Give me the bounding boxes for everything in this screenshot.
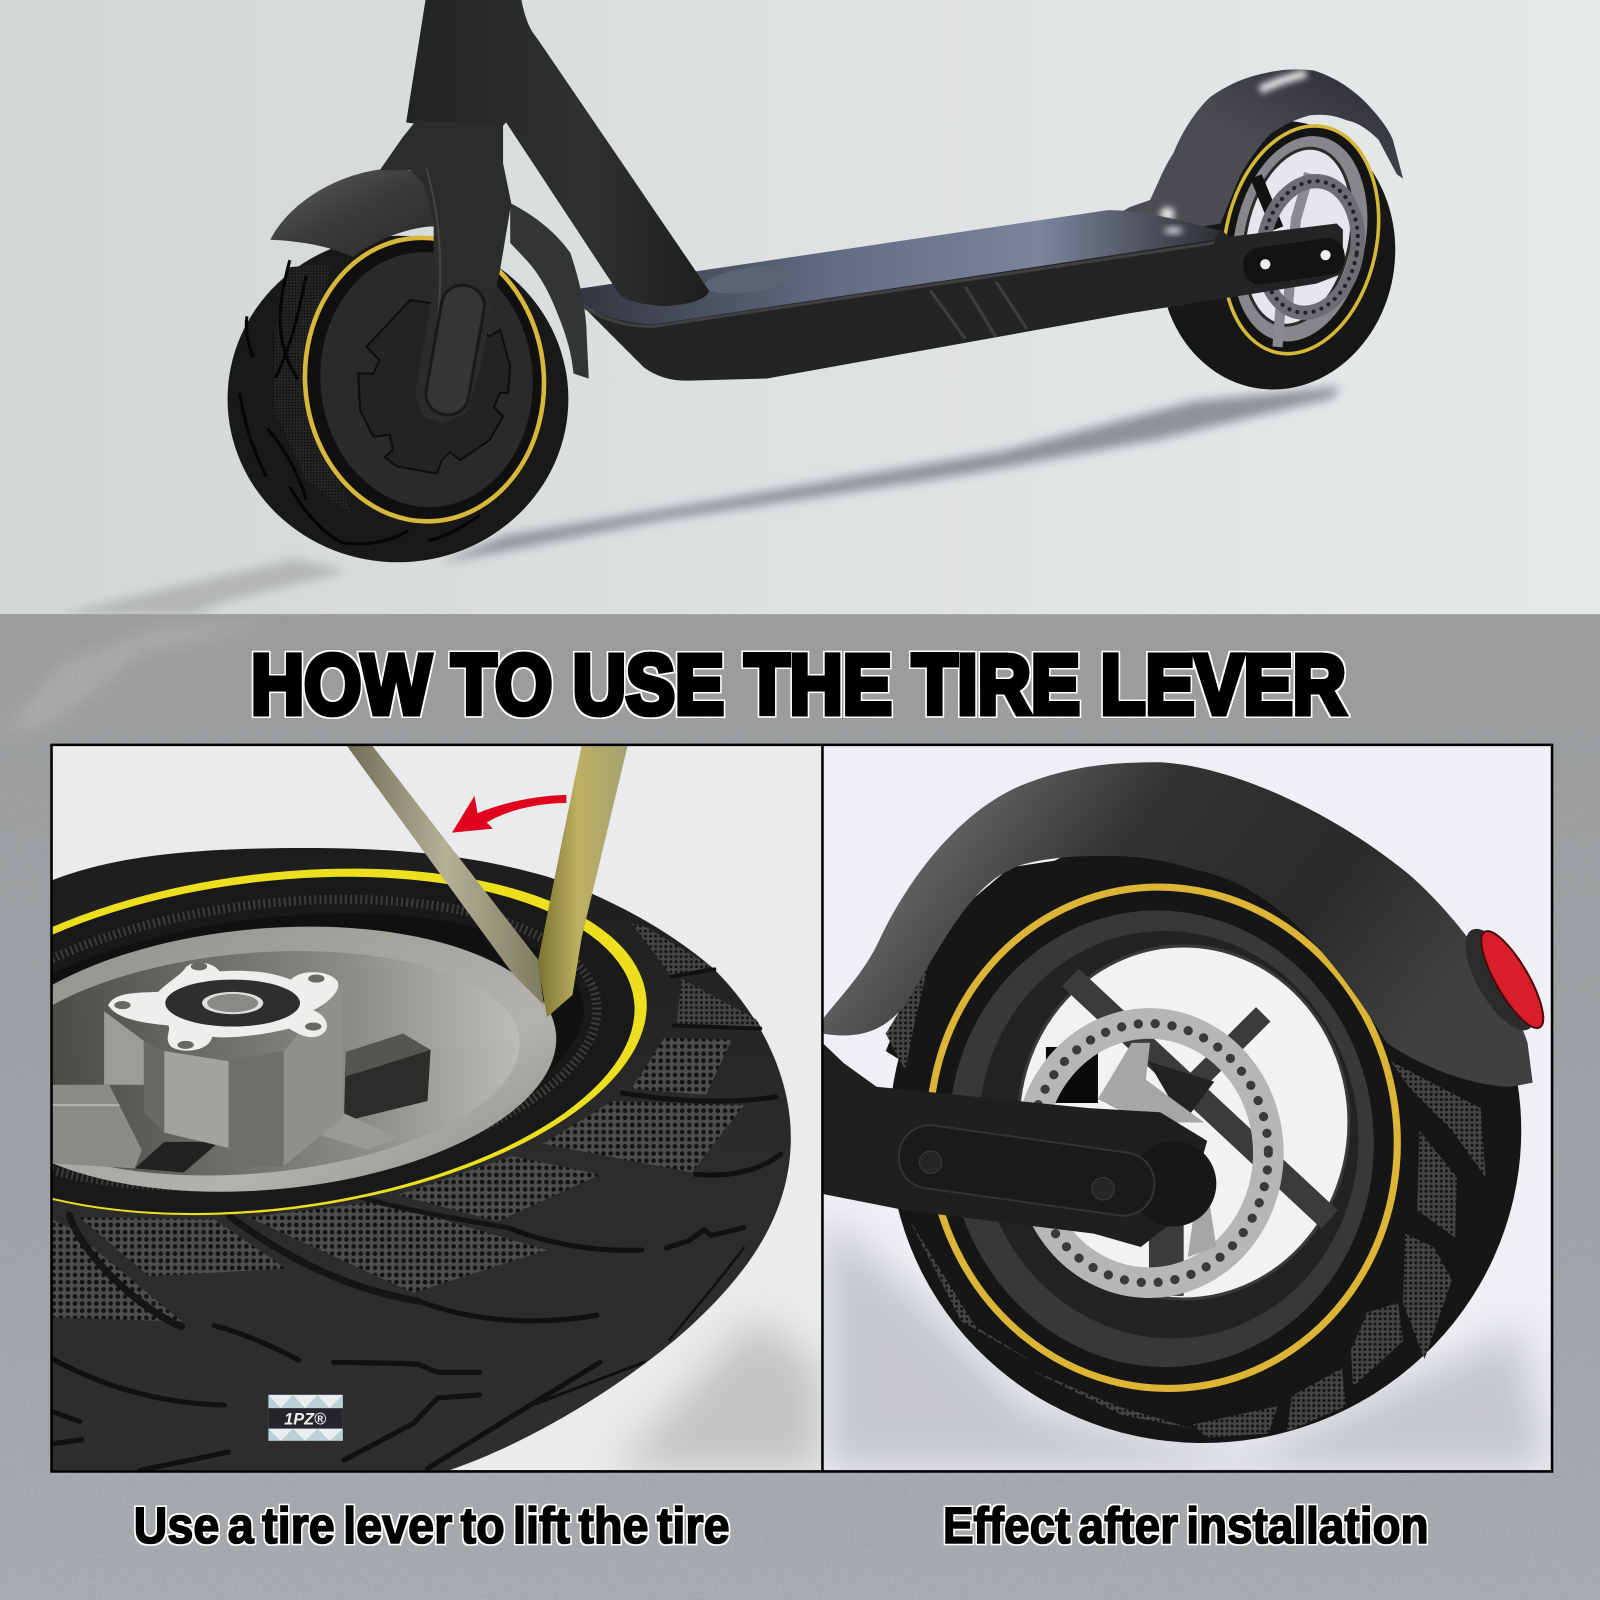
deck (579, 210, 1347, 381)
top photo: scooter on pavement (0, 0, 1600, 614)
column facets (104, 1011, 144, 1085)
panel frame (52, 745, 1552, 1471)
tread patches (51, 923, 761, 1321)
tire lever 1 (347, 746, 544, 1005)
tail light (1466, 928, 1544, 1030)
brand label 1PZ (268, 1395, 343, 1441)
gray lower background (0, 614, 1600, 1600)
tread grooves (51, 969, 781, 1470)
caption: right: Effect after installation (943, 1497, 1429, 1554)
caption: left: Use a tire lever to lift the tire (134, 1497, 730, 1554)
wheel spokes (1070, 978, 1330, 1219)
scooter ground shadow (439, 387, 1340, 563)
front fender rear part (510, 203, 589, 379)
arrow: red curved (452, 795, 566, 833)
hub (51, 962, 431, 1172)
tire lever 2 (538, 746, 628, 1017)
panel: left, tire lever lifting tire (0, 746, 821, 1470)
hub flange (108, 963, 338, 1051)
brake disc (1030, 1023, 1268, 1283)
yellow ring (52, 868, 647, 1216)
brand label 1PZ: 1PZ® (284, 1410, 327, 1428)
front fender (270, 168, 439, 257)
tire body (51, 848, 791, 1470)
fork (380, 120, 511, 423)
swing arm (822, 1043, 1207, 1247)
tire (892, 856, 1522, 1443)
yellow ring and rim (928, 884, 1401, 1392)
rear wheel (1143, 105, 1413, 405)
sidewall (52, 876, 635, 1213)
fender (822, 762, 1533, 1087)
metal rim (52, 926, 556, 1192)
swing arm plate (1241, 236, 1347, 287)
arm plate (895, 1121, 1158, 1220)
tread dots (886, 963, 1486, 1438)
panel: right, effect after installation (822, 746, 1570, 1493)
stem and diagonal tube (406, 0, 709, 306)
title: HOW TO USE THE TIRE LEVER (251, 636, 1346, 731)
front wheel (228, 230, 568, 562)
rear fender (1114, 69, 1403, 231)
